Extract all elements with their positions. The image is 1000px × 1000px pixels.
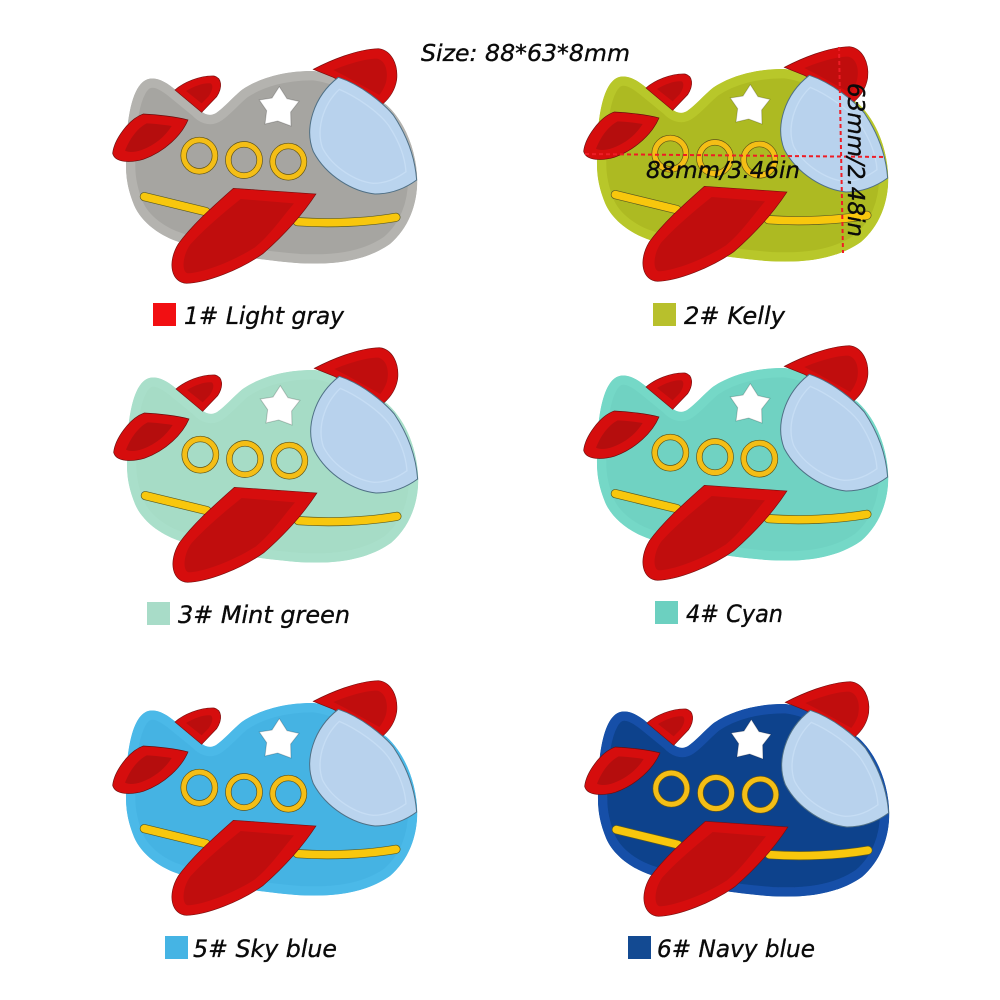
porthole rings — [655, 437, 775, 474]
swatch 1 — [153, 303, 176, 326]
swatch 5 — [165, 936, 188, 959]
cockpit window — [782, 710, 889, 827]
left wing — [114, 413, 189, 461]
size heading: Size: 88*63*8mm — [421, 41, 630, 67]
star cutout — [260, 386, 300, 425]
plane 5: sky blue — [113, 681, 417, 915]
porthole rings — [656, 773, 776, 810]
main wing — [172, 188, 316, 283]
main wing — [172, 820, 316, 915]
small tail — [175, 76, 221, 112]
small tail — [175, 708, 221, 744]
left wing — [585, 747, 660, 795]
small tail — [646, 373, 692, 409]
label 5: 5# Sky blue — [193, 935, 337, 963]
fuselage — [126, 703, 417, 896]
swatch 3 — [147, 602, 170, 625]
plane 4: cyan — [584, 346, 888, 580]
height dimension text: 63mm/2.48in — [842, 83, 868, 237]
yellow stripe — [615, 195, 867, 221]
plane 3: mint green — [114, 348, 418, 582]
swatch 6 — [628, 936, 651, 959]
plane 1: light gray — [113, 49, 417, 283]
fuselage — [127, 370, 418, 563]
left wing — [113, 114, 188, 162]
tail fin — [313, 49, 397, 104]
yellow stripe — [616, 830, 868, 856]
swatch 2 — [653, 303, 676, 326]
left wing — [113, 746, 188, 794]
porthole rings — [185, 439, 305, 476]
label 1: 1# Light gray — [184, 302, 345, 330]
label 4: 4# Cyan — [686, 600, 783, 628]
cockpit window — [310, 77, 417, 194]
tail fin — [314, 348, 398, 403]
cockpit window — [781, 374, 888, 491]
cockpit window — [311, 376, 418, 493]
yellow stripe — [144, 197, 396, 223]
fuselage — [126, 71, 417, 264]
porthole rings — [184, 140, 304, 177]
width dimension text: 88mm/3.46in — [646, 158, 800, 184]
fuselage — [597, 69, 888, 262]
tail fin — [784, 47, 868, 102]
plane 2: kelly — [584, 47, 888, 281]
star cutout — [730, 85, 770, 124]
label 3: 3# Mint green — [178, 601, 350, 629]
tail fin — [785, 682, 869, 737]
swatch 4 — [655, 601, 678, 624]
porthole rings — [184, 772, 304, 809]
main wing — [644, 821, 788, 916]
left wing — [584, 112, 659, 160]
yellow stripe — [144, 829, 396, 855]
main wing — [643, 485, 787, 580]
fuselage — [598, 704, 889, 897]
cockpit window — [781, 75, 888, 192]
left wing — [584, 411, 659, 459]
cockpit window — [310, 709, 417, 826]
label 6: 6# Navy blue — [657, 935, 815, 963]
star cutout — [259, 87, 299, 126]
tail fin — [313, 681, 397, 736]
yellow stripe — [145, 496, 397, 522]
plane 6: navy blue — [585, 682, 889, 916]
small tail — [646, 74, 692, 110]
yellow stripe — [615, 494, 867, 520]
fuselage — [597, 368, 888, 561]
height dimension line — [839, 47, 843, 253]
star cutout — [731, 720, 771, 759]
width dimension line — [585, 154, 886, 157]
star cutout — [259, 719, 299, 758]
main wing — [643, 186, 787, 281]
tail fin — [784, 346, 868, 401]
small tail — [647, 709, 693, 745]
porthole rings — [655, 138, 775, 175]
label 2: 2# Kelly — [684, 302, 786, 330]
star cutout — [730, 384, 770, 423]
main wing — [173, 487, 317, 582]
small tail — [176, 375, 222, 411]
